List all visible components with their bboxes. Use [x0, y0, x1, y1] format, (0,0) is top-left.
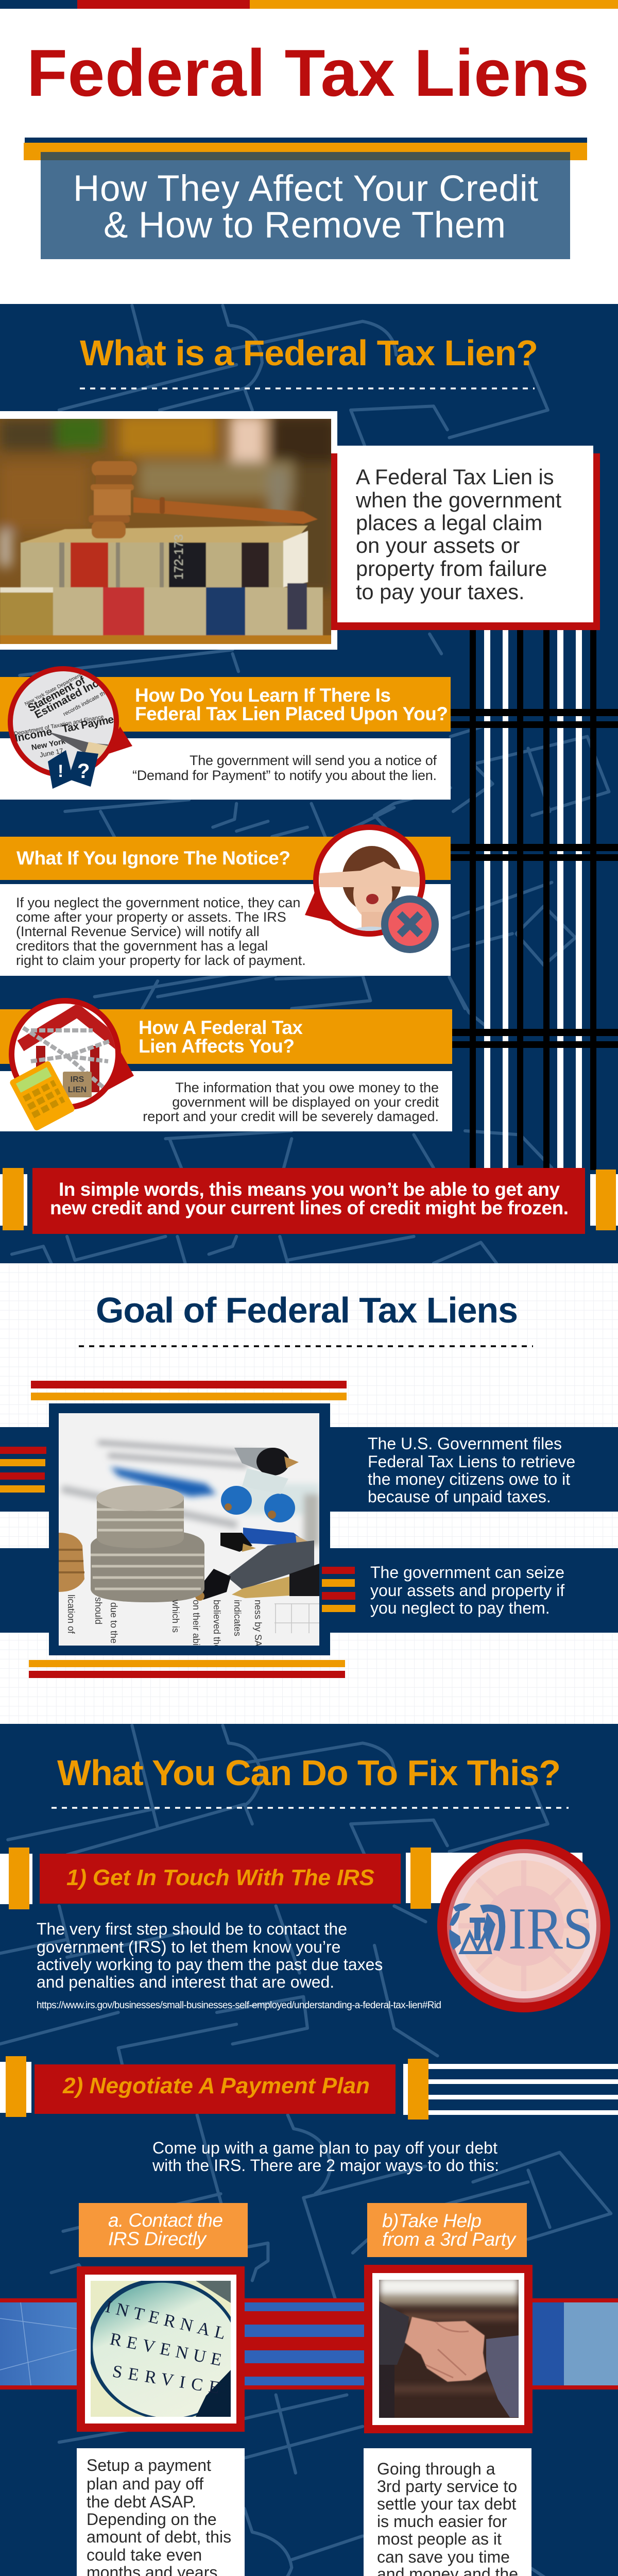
step 2 banner — [0, 2056, 618, 2120]
icon: house in chains with calculator: LIEN — [68, 1086, 87, 1094]
text: step 1 body: and penalties and interest that are owed. — [37, 1973, 334, 1991]
photo: coins and pens: on their ability — [191, 1600, 201, 1657]
text: goal statement two — [370, 1563, 564, 1617]
panel: how a federal tax lien affects you: report and your credit will be severely damaged. — [143, 1109, 439, 1124]
panel: how do you learn — [0, 666, 451, 800]
icon: house in chains with calculator — [9, 998, 134, 1131]
text box: option b step one: most people as it — [377, 2530, 502, 2548]
text: step 1 body: https://www.irs.gov/businesses/small-businesses-self-employed/understanding-a-federal-tax-lien#Rid — [37, 2000, 441, 2011]
text box: option b step one: 3rd party service to — [377, 2477, 517, 2496]
text box: option b step one: Going through a — [377, 2460, 495, 2478]
step 1 banner — [0, 1848, 582, 1909]
photo: internal revenue service seal: INTERNAL — [104, 2297, 227, 2343]
callout: federal tax lien definition — [331, 446, 600, 630]
panel: what you can do background — [0, 1724, 618, 2576]
text box: option a step one: amount of debt, this — [87, 2528, 231, 2546]
step 1 banner: 1) Get In Touch With The IRS — [66, 1865, 374, 1890]
icon: tax document in speech bubble: New York — [31, 737, 66, 752]
panel: how a federal tax lien affects you — [0, 998, 452, 1131]
photo: coins and pens: believed the — [212, 1600, 222, 1650]
text: step 2 intro — [152, 2139, 499, 2175]
panel: goal of federal tax liens background — [0, 1263, 618, 1724]
text box: option a step one: Depending on the — [87, 2510, 217, 2529]
callout: federal tax lien definition: to pay your taxes. — [356, 580, 525, 604]
title: Federal Tax Liens — [27, 36, 589, 110]
icon: tax document in speech bubble: records indicate the — [62, 689, 109, 718]
panel: how a federal tax lien affects you: Lien Affects You? — [139, 1036, 295, 1057]
photo: coins and pens: should — [93, 1597, 104, 1624]
icon: tax document in speech bubble: June 17 — [39, 747, 64, 759]
callout: federal tax lien definition: A Federal Tax Lien is — [356, 465, 554, 489]
photo: coins and pens: which is — [170, 1599, 181, 1633]
text: goal statement one: Federal Tax Liens to retrieve — [368, 1452, 575, 1471]
image band behind photos — [0, 2298, 618, 2389]
text: goal statement one: because of unpaid taxes. — [368, 1487, 551, 1506]
panel: how do you learn: How Do You Learn If There Is — [135, 685, 391, 706]
text: goal statement two: The government can seize — [370, 1563, 564, 1582]
panel: how a federal tax lien affects you: How A Federal Tax — [139, 1017, 303, 1038]
icon: IRS badge: IRS — [508, 1896, 593, 1962]
text box: option a step one: could take even — [87, 2546, 202, 2564]
panel: what if you ignore the notice: right to claim your property for lack of payment. — [16, 953, 306, 968]
panel: what if you ignore the notice: What If You Ignore The Notice? — [16, 848, 290, 869]
panel: what if you ignore the notice: If you neglect the government notice, they can — [16, 895, 300, 910]
callout: federal tax lien definition: places a legal claim — [356, 511, 542, 535]
icon: tax document in speech bubble: Statement of — [26, 674, 88, 714]
icon: house in chains with calculator: IRS — [71, 1075, 84, 1084]
text box: option b step one: is much easier for — [377, 2512, 507, 2531]
text box: option a step one: Setup a payment — [87, 2456, 211, 2475]
icon: tax document in speech bubble: New York State Department — [24, 672, 83, 707]
icon: tax document in speech bubble: Estimated Inc — [33, 677, 101, 721]
icon: IRS badge — [437, 1839, 610, 2012]
callout: federal tax lien definition: property from failure — [356, 556, 547, 581]
top colour bar — [0, 0, 618, 9]
panel: how a federal tax lien affects you: government will be displayed on your credit — [172, 1094, 439, 1110]
text box: option b step one — [364, 2448, 531, 2576]
panel: what if you ignore the notice: (Internal Revenue Service) will notify all — [16, 924, 260, 939]
text box: option a step one: the debt ASAP. — [87, 2493, 196, 2511]
photo: internal revenue service seal: SERVICE — [111, 2362, 221, 2398]
photo: handshake — [364, 2265, 533, 2433]
option a heading: a. Contact the — [108, 2210, 223, 2231]
icon: tax document in speech bubble: Tax Payme — [61, 714, 115, 735]
option b heading: b)Take Help — [382, 2210, 482, 2231]
icon: tax document in speech bubble: ? — [77, 760, 90, 783]
step 2 banner: 2) Negotiate A Payment Plan — [62, 2073, 370, 2098]
photo: coins and pens: indicates — [232, 1600, 243, 1636]
heading: goal of federal tax liens: Goal of Federal Tax Liens — [96, 1290, 518, 1330]
text box: option b step one: settle your tax debt — [377, 2495, 516, 2513]
photo: gavel on law books — [0, 411, 338, 650]
option a heading — [79, 2203, 248, 2257]
middle stripes — [322, 1567, 355, 1612]
text: goal statement two: you neglect to pay them. — [370, 1599, 550, 1617]
icon: woman covering eyes — [305, 824, 439, 953]
text: step 2 intro: Come up with a game plan to pay off your debt — [152, 2139, 497, 2157]
photo: coins and pens: lication of — [66, 1595, 76, 1634]
heading: what is a federal tax lien: What is a Federal Tax Lien? — [80, 333, 538, 373]
icon: tax document in speech bubble: Department of Taxation and Finance — [13, 714, 104, 737]
text: step 1 body: government (IRS) to let them know you’re — [37, 1938, 340, 1956]
panel: what if you ignore the notice: come after your property or assets. The IRS — [16, 909, 286, 925]
option b heading — [367, 2203, 527, 2257]
subtitle panel: How They Affect Your Credit — [73, 168, 538, 209]
photo: internal revenue service seal — [77, 2266, 245, 2432]
icon: tax document in speech bubble — [8, 666, 132, 789]
photo: coins and pens — [59, 1413, 319, 1657]
text: step 1 body: The very first step should be to contact the — [37, 1920, 347, 1938]
text: goal statement one — [368, 1434, 575, 1506]
callout: federal tax lien definition: when the government — [355, 488, 562, 512]
heading: what you can do to fix this: What You Can Do To Fix This? — [57, 1753, 561, 1793]
decorative right stripes with black grid — [451, 630, 618, 1170]
callout banner: in simple words: In simple words, this means you won’t be able to get any — [59, 1179, 560, 1200]
icon: red x badge — [381, 895, 439, 953]
text box: option a step one: plan and pay off — [87, 2475, 203, 2493]
icon: tax document in speech bubble: Income — [14, 725, 53, 744]
text: step 1 body — [37, 1920, 441, 2011]
subtitle panel — [24, 138, 587, 259]
photo: internal revenue service seal: REVENUE — [108, 2330, 223, 2370]
panel: what is a federal tax lien background — [0, 304, 618, 1263]
photo: coins and pens: ness by SA — [253, 1600, 263, 1647]
text: step 2 intro: with the IRS. There are 2 major ways to do this: — [152, 2156, 499, 2175]
callout banner: in simple words — [0, 1168, 618, 1234]
panel: how a federal tax lien affects you: The information that you owe money to the — [175, 1080, 439, 1095]
panel: how do you learn: “Demand for Payment” to notify you about the lien. — [132, 768, 437, 783]
goal bands and stripes — [0, 1381, 618, 1678]
photo: gavel on law books: 172-173 — [172, 534, 186, 580]
subtitle panel: & How to Remove Them — [104, 205, 506, 246]
text: step 1 body: actively working to pay them the past due taxes — [37, 1955, 383, 1974]
icon: tax document in speech bubble: ! — [58, 761, 63, 781]
text box: option a step one — [77, 2448, 245, 2576]
text box: option b step one: can save you time — [377, 2548, 510, 2566]
panel: how do you learn: The government will send you a notice of — [190, 753, 437, 768]
photo: coins and pens: due to the — [109, 1602, 119, 1643]
option a heading: IRS Directly — [108, 2228, 207, 2249]
text: goal statement two: your assets and property if — [370, 1581, 564, 1600]
callout banner: in simple words: new credit and your current lines of credit might be frozen. — [50, 1197, 569, 1218]
panel: what if you ignore the notice: creditors that the government has a legal — [16, 938, 268, 954]
panel: how do you learn: Federal Tax Lien Placed Upon You? — [135, 703, 448, 724]
text: goal statement one: The U.S. Government files — [368, 1434, 562, 1453]
callout: federal tax lien definition: on your assets or — [356, 533, 520, 557]
panel: what if you ignore the notice — [0, 824, 451, 976]
option b heading: from a 3rd Party — [382, 2229, 517, 2250]
text: goal statement one: the money citizens owe to it — [368, 1470, 570, 1488]
